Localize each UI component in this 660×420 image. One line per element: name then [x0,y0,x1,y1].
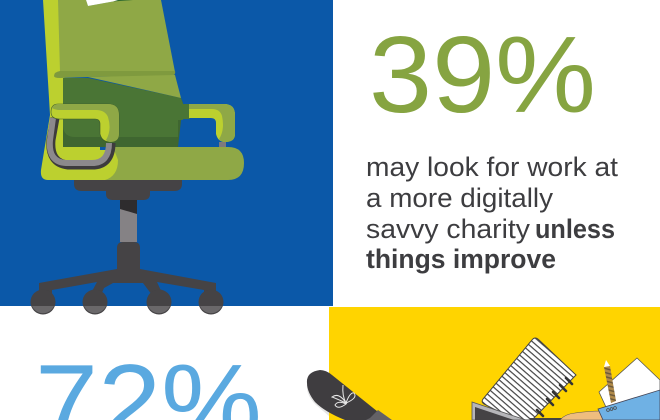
text block: chair stat description: savvy charity [366,214,531,244]
sleeve buttons [607,407,616,411]
near armrest with gray loop [50,104,119,165]
text block: chair stat description: a more digitally [366,183,554,213]
text block: chair stat description: unless [535,214,615,244]
text block: chair stat description: may look for work at [366,152,619,182]
chair backrest [41,0,183,180]
illustration: pencil [604,360,616,403]
panel: yellow desk background [329,307,660,420]
paper on seat back [86,0,133,6]
illustration: hand and sleeve [560,390,660,420]
panel: blue chair background [0,0,333,306]
text block: chair stat description: things improve [366,244,556,274]
shoe leaf mark [332,385,355,407]
chair base and wheels [30,180,224,314]
far armrest [182,104,235,147]
illustration: shoe [307,370,392,420]
illustration: paper [599,358,660,420]
illustration: notebook [482,338,576,420]
chair seat [105,147,244,180]
text block: chair stat description [366,152,619,274]
notebook rings [537,378,572,416]
illustration: office chair [30,0,244,314]
illustration: laptop [472,402,562,420]
stat: 39%: 39% [369,14,596,136]
